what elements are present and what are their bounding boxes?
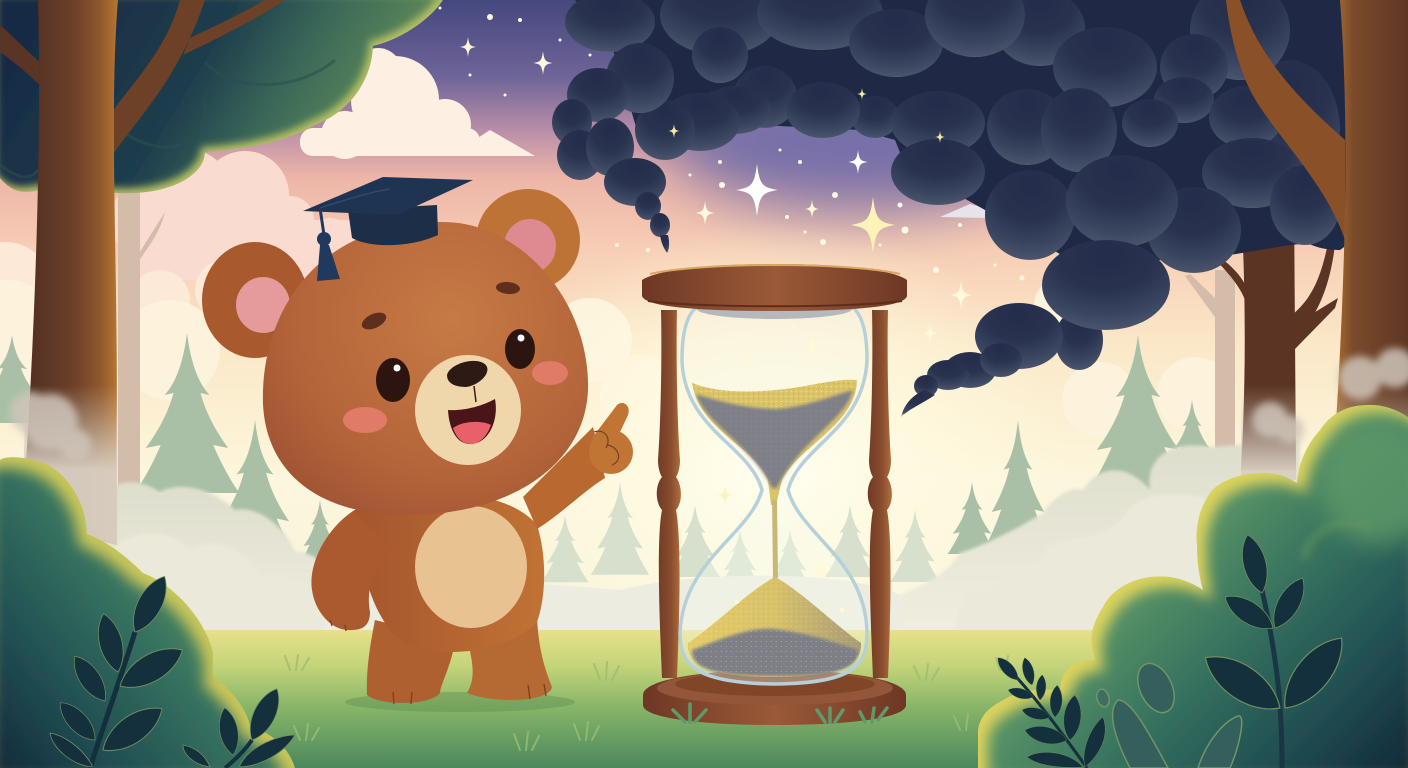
smoke: upper lobes — [565, 0, 1340, 245]
bear left ear — [202, 242, 308, 358]
hourglass — [642, 264, 907, 725]
star field — [438, 6, 1052, 322]
bear head — [263, 222, 588, 515]
falling sand — [772, 500, 778, 578]
hourglass glow — [475, 220, 1075, 720]
right canopy — [1215, 0, 1408, 250]
glass bulbs — [680, 307, 867, 684]
smoke: base mass — [575, 0, 1345, 260]
bear philtrum — [474, 386, 476, 402]
bear right leg — [467, 615, 552, 700]
left canopy — [0, 0, 443, 193]
right branch — [1226, 0, 1345, 240]
bear eyes — [376, 329, 535, 402]
bear left leg — [367, 620, 455, 703]
fog band: left — [100, 482, 345, 640]
hourglass bottom plate — [643, 670, 906, 725]
bear cheeks — [343, 361, 568, 433]
sparkles — [460, 37, 972, 343]
bear eyebrows — [359, 281, 520, 333]
grass at hourglass base — [673, 704, 887, 722]
fog band: right — [890, 440, 1300, 640]
smoke: right billow — [901, 155, 1241, 417]
bottom sand — [688, 577, 861, 677]
inner bush lobe — [1304, 523, 1372, 560]
top bush lobe — [1318, 416, 1408, 544]
distant pine trees — [0, 333, 1214, 564]
ground — [0, 630, 1408, 768]
top sand — [692, 380, 857, 505]
clouds: pale pink and white — [0, 48, 1233, 438]
bear body — [353, 493, 544, 652]
dark smoke cloud — [552, 0, 1345, 417]
smoke: left wisp — [552, 43, 771, 253]
bear pointing paw — [589, 403, 633, 474]
fern: left large — [50, 571, 189, 768]
right bushes — [978, 405, 1408, 768]
left foreground tree — [0, 0, 285, 545]
fern: right large — [1196, 532, 1355, 768]
purple dusk patch under smoke — [670, 70, 1050, 210]
mid trunk mist — [1241, 370, 1296, 480]
pale hills behind hourglass — [340, 576, 900, 640]
right trunk mist — [1335, 370, 1408, 440]
left bushes — [0, 457, 295, 768]
right trunk — [1335, 0, 1408, 440]
fern: left small — [183, 684, 295, 768]
bear nose — [447, 361, 487, 387]
bear right ear — [476, 189, 580, 291]
hourglass top plate — [642, 264, 907, 319]
bear mouth — [448, 399, 496, 444]
left trunk — [22, 0, 118, 545]
left branches — [0, 0, 285, 170]
graduation cap — [303, 177, 473, 281]
glass sparkles — [717, 325, 844, 612]
bear left arm — [311, 511, 392, 630]
bear tongue — [453, 422, 491, 444]
grass tufts — [285, 655, 1008, 750]
bear right arm — [523, 427, 605, 529]
background right tree — [1214, 200, 1338, 470]
hourglass right post — [868, 310, 892, 678]
left trunk mist — [22, 380, 118, 545]
bear — [202, 177, 633, 712]
bear shadow — [345, 692, 575, 712]
pale distant pines behind hourglass — [541, 482, 940, 586]
hourglass left post — [657, 310, 681, 678]
bear muzzle — [415, 355, 521, 465]
bear belly — [415, 506, 527, 628]
distant pale tree trunks — [118, 190, 1235, 510]
mist puffs around trunks — [10, 348, 1408, 461]
right foreground tree — [1226, 0, 1408, 480]
bear claws — [330, 620, 546, 704]
fern: right small — [994, 654, 1105, 768]
soft leaves on right bush — [1095, 658, 1242, 768]
